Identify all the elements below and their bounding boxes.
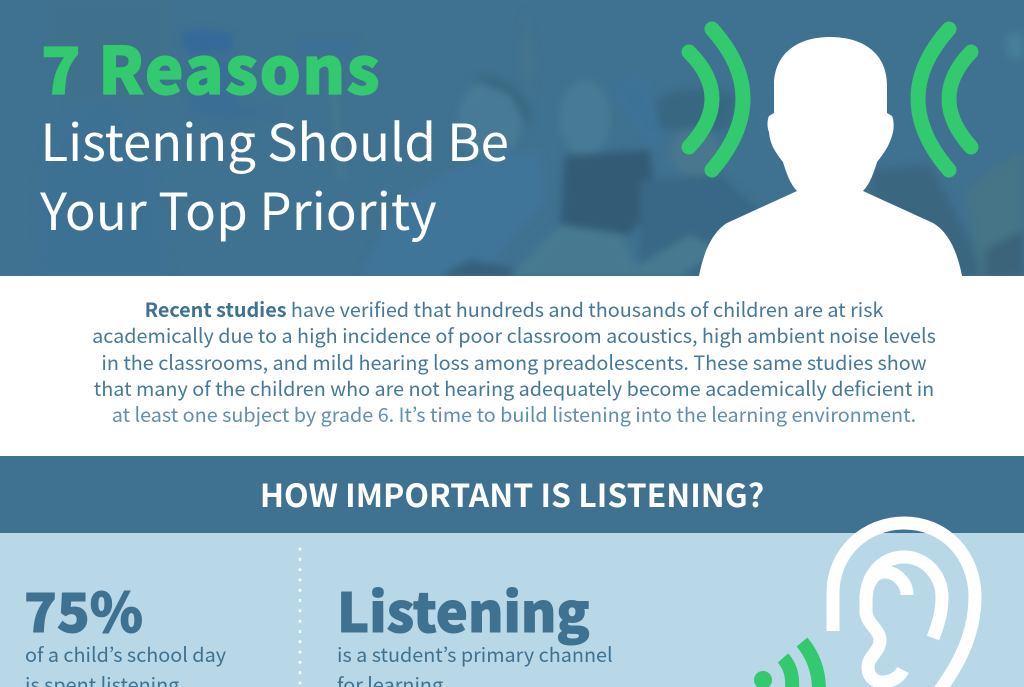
text block: introduction: that many of the children who are not hearing adequately become academically deficient in — [94, 373, 934, 402]
icon: green signal waves — [783, 642, 819, 687]
text block: introduction: at least one subject by grade 6. It’s time to build listening into the learning environment. — [112, 399, 916, 428]
title: 7 Reasons: 7 Reasons — [41, 19, 381, 113]
icon: person silhouette — [699, 37, 962, 276]
text: primary channel — [337, 639, 613, 687]
text: primary channel: is a student’s primary channel — [337, 639, 613, 668]
stat: 75%: 75% — [24, 569, 143, 648]
divider: dotted line — [298, 548, 302, 684]
text block: introduction: academically due to a high incidence of poor classroom acoustics, high ambient noise levels — [92, 320, 936, 349]
title: Listening Should Be: Listening Should Be — [40, 102, 509, 176]
icon: person silhouette with sound waves — [682, 22, 978, 276]
stat: Listening: Listening — [337, 569, 590, 648]
text block: introduction — [92, 294, 936, 428]
text: of a child's school day — [25, 639, 226, 687]
text block: introduction: in the classrooms, and mild hearing loss among preadolescents. These same studies show — [101, 347, 927, 376]
icon: sound waves — [689, 29, 971, 170]
heading: How important is listening: HOW IMPORTANT IS LISTENING? — [260, 470, 764, 516]
text block: introduction: Recent studies have verified that hundreds and thousands of children are at risk — [145, 294, 883, 323]
panel: listening facts — [0, 533, 1024, 687]
text: of a child's school day: of a child’s school day — [25, 639, 226, 668]
title: Your Top Priority: Your Top Priority — [40, 171, 437, 245]
icon: ear with sound waves — [754, 516, 982, 687]
panel: section heading band — [0, 456, 1024, 533]
icon: ear outline — [833, 523, 975, 687]
panel: header photo background — [0, 0, 1024, 276]
